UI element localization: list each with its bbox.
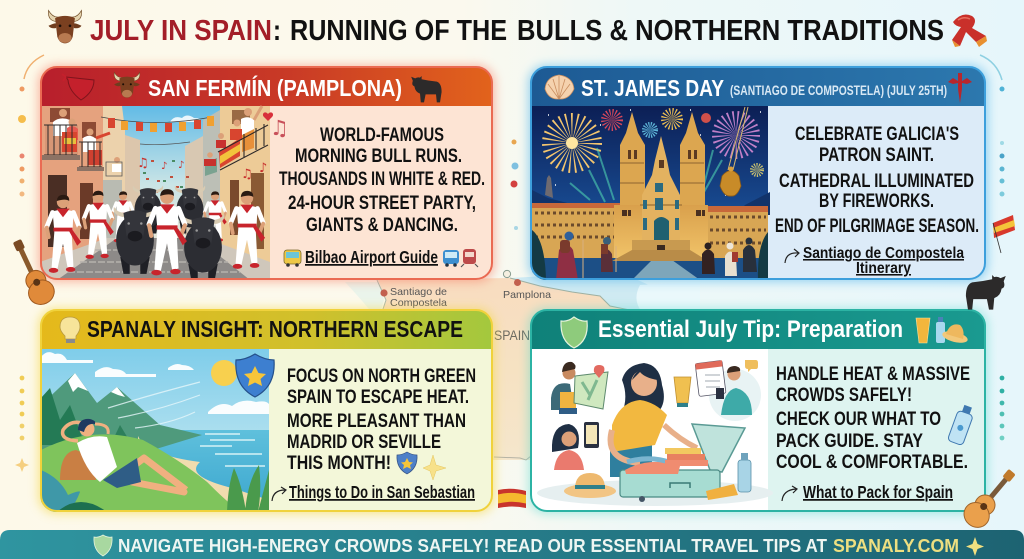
text block: Essential July Tip: COOL & COMFORTABLE.: [776, 452, 968, 473]
clouds: [41, 352, 269, 414]
decorative dots left top: [18, 55, 44, 196]
small runners: [112, 191, 135, 242]
map marker: Santiago de Compostela: Compostela: [390, 297, 447, 309]
decorative dots lower left: [15, 376, 29, 472]
icon: Spanish flag bottom: [498, 489, 526, 508]
illustration: relaxing on northern coast: [41, 349, 269, 512]
text block: St. James Day: [775, 124, 979, 237]
text block: Spanaly Insight: FOCUS ON NORTH GREEN: [287, 366, 476, 387]
footer banner: SPANALY.COM: [833, 536, 959, 556]
icon: shield: [94, 535, 112, 556]
map marker: Pamplona: [503, 270, 551, 301]
text block: San Fermin: 24-HOUR STREET PARTY,: [288, 193, 476, 214]
map marker: Santiago de Compostela: [380, 286, 447, 309]
text block: St. James Day: CATHEDRAL ILLUMINATED: [779, 171, 974, 192]
sun: [211, 360, 237, 386]
sea: [158, 430, 269, 498]
text block: Spanaly Insight: THIS MONTH!: [287, 453, 391, 474]
panel header: St. James Day: ST. JAMES DAY: [581, 75, 724, 101]
far bulls: [133, 186, 163, 234]
panel header: Essential July Tip: [530, 310, 986, 349]
woman packing: [610, 363, 697, 477]
sunscreen lying: [706, 484, 738, 500]
link: Bilbao Airport Guide: Bilbao Airport Guide: [305, 247, 438, 267]
link: Santiago de Compostela Itinerary: Itinerary: [856, 260, 911, 277]
icon: sunscreen, bottle and hat: [916, 317, 969, 345]
text block: San Fermin: WORLD-FAMOUS: [320, 125, 444, 146]
confetti and music notes: ♪: [161, 161, 167, 172]
text block: San Fermin: GIANTS & DANCING.: [306, 215, 458, 236]
icon: small shield: [397, 452, 417, 474]
confetti and music notes: [137, 156, 267, 193]
link: Things to Do in San Sebastian: Things to Do in San Sebastian: [289, 482, 475, 502]
icon: red bandana: [62, 74, 94, 100]
water bottle: [738, 453, 751, 492]
text block: St. James Day: CELEBRATE GALICIA'S: [795, 124, 959, 145]
icon: green shield: [561, 317, 587, 348]
man with checklist: [695, 360, 761, 421]
icon: music note: ♫: [270, 116, 289, 140]
icon: heart: [263, 112, 273, 121]
arrow: [782, 486, 797, 501]
text block: Spanaly Insight: MADRID OR SEVILLE: [287, 432, 441, 453]
text block: St. James Day: PATRON SAINT.: [819, 145, 934, 166]
text block: San Fermin: THOUSANDS IN WHITE & RED.: [279, 169, 485, 190]
pilgrims: [532, 230, 768, 280]
map label: Spain: SPAIN: [494, 328, 530, 343]
icon: red scarf: [952, 14, 987, 47]
icon: guitar right: [959, 464, 1023, 533]
confetti and music notes: ♪: [178, 160, 184, 171]
link: What to Pack for Spain: What to Pack for Spain: [803, 482, 953, 502]
fireworks: [548, 110, 761, 208]
illustration: cathedral with fireworks: [532, 106, 770, 280]
icon: blue bus: [443, 250, 459, 267]
panel header: San Fermin: SAN FERMÍN (PAMPLONA): [148, 74, 402, 101]
icon: light bulb: [60, 317, 80, 343]
illustration: packing for the trip: [532, 349, 773, 512]
text block: Spanaly Insight: SPAIN TO ESCAPE HEAT.: [287, 387, 469, 408]
plants: [41, 470, 80, 512]
panel header: San Fermin: [40, 67, 493, 106]
text block: Essential July Tip: [776, 364, 970, 473]
decorative dots right top: [980, 55, 1004, 196]
panel header: Essential July Tip: Essential July Tip: Preparation: [598, 316, 903, 343]
text block: San Fermin: MORNING BULL RUNS.: [295, 146, 462, 167]
icon: red train: [461, 249, 478, 267]
map marker: Santiago de Compostela: Santiago de: [390, 286, 447, 298]
beach: [138, 436, 269, 512]
link: Santiago de Compostela Itinerary: Santiago de Compostela: [803, 245, 964, 262]
near bulls: [114, 207, 156, 274]
icon: scallop shell: [545, 75, 574, 99]
sun hat: [564, 473, 616, 498]
mountains: [42, 373, 202, 450]
balconies with spectators: [42, 106, 268, 176]
decorative dots lower right: [1000, 376, 1004, 440]
illustration: bull run street: [40, 106, 270, 281]
panel: San Fermin: [38, 65, 495, 282]
panel: Essential July Tip: [528, 308, 988, 514]
text block: St. James Day: BY FIREWORKS.: [819, 191, 934, 212]
man reclining: [60, 419, 186, 492]
arrow: [272, 487, 286, 501]
title: [48, 10, 987, 47]
hills: [532, 190, 770, 215]
wind swirls: [108, 382, 200, 428]
text block: Spanaly Insight: [287, 366, 476, 480]
cathedral facade: [614, 205, 708, 262]
title: JULY IN SPAIN: [90, 15, 272, 47]
icon: yellow bus: [284, 250, 301, 267]
title: BULLS & NORTHERN TRADITIONS: [517, 15, 944, 47]
icon: black bull right: [966, 275, 1006, 310]
icon: sparkle: [966, 537, 984, 556]
text block: Essential July Tip: CROWDS SAFELY!: [776, 385, 912, 406]
title: RUNNING OF THE: [290, 15, 507, 47]
icon: guitar left: [6, 235, 58, 309]
wings: [532, 208, 768, 258]
traveller with map: [551, 362, 608, 414]
ground: [532, 258, 768, 280]
icon: bull head: [48, 10, 82, 43]
map marker: Pamplona: Pamplona: [503, 289, 551, 301]
bunting: [101, 116, 214, 145]
confetti and music notes: ♫: [137, 156, 149, 171]
icon: sparkles: [423, 455, 446, 480]
icon: Spanish flag right: [993, 215, 1015, 253]
panel: Spanaly Insight: [38, 308, 495, 514]
panel header: Spanaly Insight: SPANALY INSIGHT: NORTHERN ESCAPE: [87, 316, 463, 342]
text block: San Fermin: [279, 125, 485, 236]
link: Things to Do in San Sebastian: [272, 482, 475, 502]
suitcase: [620, 424, 745, 502]
map of northern Spain: [345, 270, 700, 460]
arrow: [785, 249, 799, 263]
text block: Essential July Tip: HANDLE HEAT & MASSIVE: [776, 364, 970, 385]
icon: water bottle: [947, 404, 976, 446]
panel header: St. James Day: [530, 67, 986, 106]
footer banner: [0, 530, 1024, 559]
footer banner: NAVIGATE HIGH-ENERGY CROWDS SAFELY! READ OUR ESSENTIAL TRAVEL TIPS AT: [118, 536, 827, 556]
grass: [41, 434, 240, 512]
confetti and music notes: ♫: [241, 167, 253, 182]
text block: Essential July Tip: PACK GUIDE. STAY: [776, 431, 923, 452]
sunscreen tube: [674, 377, 691, 407]
text block: Essential July Tip: CHECK OUR WHAT TO: [776, 409, 941, 430]
panel header: Spanaly Insight: [40, 310, 493, 349]
panel: St. James Day: [528, 65, 988, 282]
panel header: St. James Day: (SANTIAGO DE COMPOSTELA) (JULY 25TH): [730, 82, 947, 98]
icon: bull head small: [114, 72, 140, 98]
link: Santiago de Compostela Itinerary: [785, 245, 964, 277]
icon: Santiago cross: [948, 73, 972, 103]
icon: star shield: [236, 354, 274, 397]
text block: Spanaly Insight: MORE PLEASANT THAN: [287, 411, 466, 432]
title: :: [273, 15, 281, 47]
confetti and music notes: ♪: [259, 161, 267, 176]
lead runners: [47, 195, 81, 273]
girl with phone: [552, 422, 599, 470]
decorative dots centre: [510, 140, 518, 230]
icon: black bull: [411, 76, 442, 102]
botafumeiro censer: [720, 107, 748, 196]
